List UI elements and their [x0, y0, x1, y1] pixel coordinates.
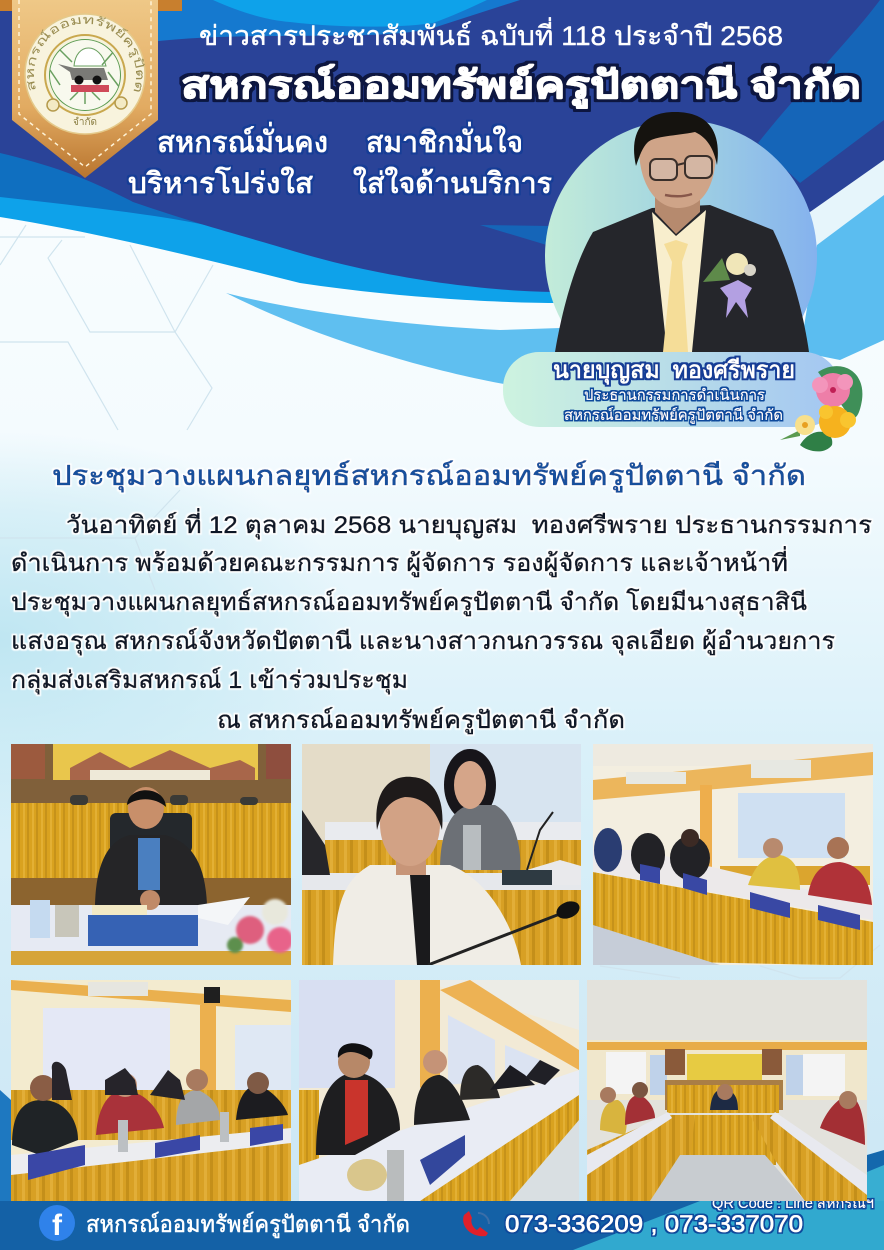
- glasses: [650, 156, 712, 180]
- article body: ดำเนินการ พร้อมด้วยคณะกรรมการ ผู้จัดการ รองผู้จัดการ และเจ้าหน้าที่: [11, 546, 788, 578]
- mouth: [665, 194, 692, 196]
- article body: กลุ่มส่งเสริมสหกรณ์ 1 เข้าร่วมประชุม: [11, 666, 408, 695]
- icon: facebook: [39, 1205, 75, 1242]
- article body: แสงอรุณ สหกรณ์จังหวัดปัตตานี และนางสาวกนกวรรณ จุลเอียด ผู้อำนวยการ: [11, 627, 835, 656]
- shirt: [652, 210, 706, 352]
- photo: U-shaped meeting room overview: [587, 980, 867, 1201]
- phone numbers: 073-336209 , 073-337070: [505, 1211, 803, 1238]
- article body: ประชุมวางแผนกลยุทธ์สหกรณ์ออมทรัพย์ครูปัตตานี จำกัด โดยมีนางสุธาสินี: [11, 588, 807, 617]
- photo: chairman at head table: [11, 744, 293, 965]
- face: [639, 128, 716, 208]
- photo: members along table diagonal: [299, 980, 579, 1201]
- article body: [11, 508, 872, 735]
- photo: members seated at table: [11, 980, 291, 1201]
- article body: วันอาทิตย์ ที่ 12 ตุลาคม 2568 นายบุญสม ทองศรีพราย ประธานกรรมการ: [66, 508, 872, 540]
- slogan: สหกรณ์มั่นคง: [157, 122, 328, 159]
- gold shield: [12, 0, 158, 178]
- organisation: สหกรณ์ออมทรัพย์ครูปัตตานี จำกัด: [564, 407, 783, 424]
- name plate: [503, 352, 840, 427]
- logo badge: [0, 0, 182, 178]
- round cooperative seal: จำกัด: [73, 117, 97, 128]
- chairman name: นายบุญสม ทองศรีพราย: [553, 357, 795, 385]
- position: ประธานกรรมการดำเนินการ: [584, 387, 765, 404]
- tie: [663, 240, 688, 352]
- QR code caption: QR Code : Line สหกรณ์ฯ: [712, 1195, 874, 1212]
- portrait jacket: [555, 205, 809, 352]
- article body: ณ สหกรณ์ออมทรัพย์ครูปัตตานี จำกัด: [217, 706, 625, 735]
- newsletter issue line: ข่าวสารประชาสัมพันธ์ ฉบับที่ 118 ประจำปี 2568: [199, 17, 783, 51]
- photo: woman speaking at microphone: [302, 744, 582, 965]
- ribbon top bar: [0, 0, 182, 11]
- icon: tropical flowers: [780, 366, 862, 451]
- round cooperative seal: [24, 14, 146, 135]
- hair: [634, 112, 718, 166]
- boutonniere: [703, 253, 756, 318]
- icon: phone: [463, 1211, 489, 1236]
- main title: สหกรณ์ออมทรัพย์ครูปัตตานี จำกัด: [181, 64, 861, 109]
- icon: facebook: f: [52, 1209, 63, 1242]
- photo: committee along table: [593, 744, 873, 965]
- slogan: [128, 122, 552, 200]
- footer band: [0, 1090, 884, 1250]
- blue wave header: [0, 0, 884, 385]
- facebook page name: สหกรณ์ออมทรัพย์ครูปัตตานี จำกัด: [86, 1211, 410, 1238]
- slogan: สมาชิกมั่นใจ: [366, 122, 523, 159]
- article heading: ประชุมวางแผนกลยุทธ์สหกรณ์ออมทรัพย์ครูปัตตานี จำกัด: [52, 460, 806, 493]
- neck: [655, 190, 700, 234]
- slogan: บริหารโปร่งใส: [128, 166, 313, 200]
- slogan: ใส่ใจด้านบริการ: [353, 166, 552, 200]
- chairman portrait: [545, 112, 817, 392]
- background hexagon pattern: [0, 225, 880, 1080]
